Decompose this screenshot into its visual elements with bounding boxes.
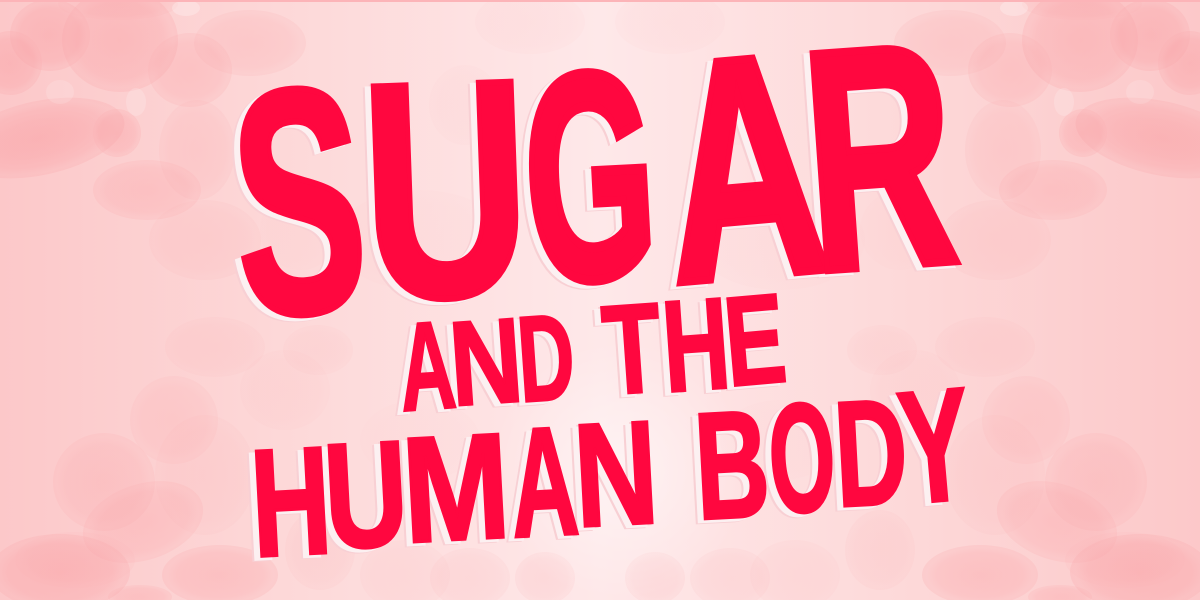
heading words: HUMAN BODY: Y [892,353,978,538]
heading words: HUMAN BODY: D [831,369,911,539]
heading words: AND THE: A [394,294,460,437]
heading words: HUMAN BODY: B [691,379,773,552]
heading word: SUGAR: G [517,10,663,344]
heading words: HUMAN BODY [247,353,978,590]
heading words: HUMAN BODY: M [398,401,514,575]
title: SUGAR AND THE HUMAN BODY [222,0,978,590]
heading word: SUGAR: U [357,14,535,364]
heading words: HUMAN BODY: A [506,394,582,571]
heading words: AND THE: T [598,275,666,422]
heading words: HUMAN BODY: U [320,410,412,581]
heading words: HUMAN BODY: N [570,390,662,558]
heading words: AND THE: N [445,293,527,432]
heading words: AND THE [394,267,791,437]
heading words: AND THE: E [719,267,791,414]
heading word: SUGAR [222,0,966,385]
heading word: SUGAR: S [222,19,376,385]
heading words: HUMAN BODY: O [765,371,840,546]
heading words: HUMAN BODY: H [247,415,335,590]
heading words: AND THE: H [658,270,734,420]
heading words: AND THE: D [513,287,579,428]
